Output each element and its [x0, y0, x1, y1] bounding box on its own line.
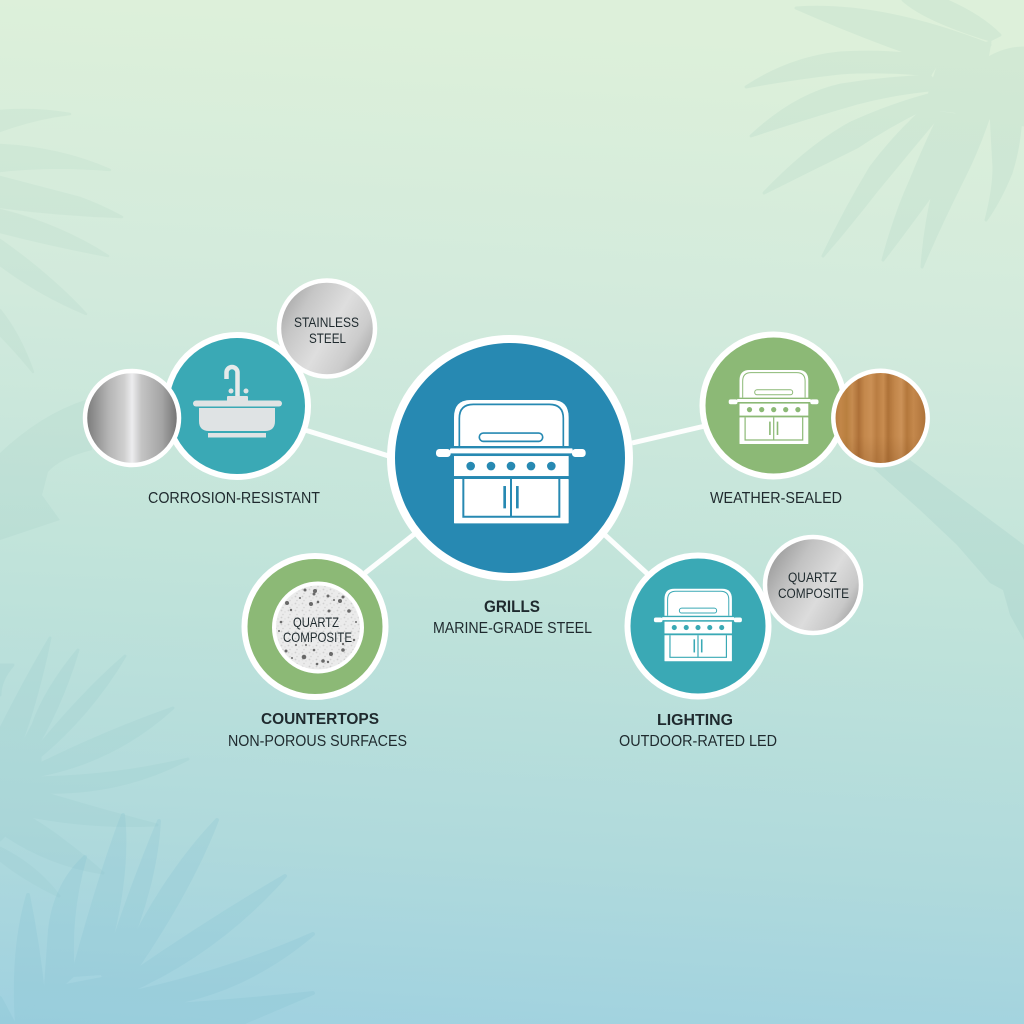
swatch label: COMPOSITE — [778, 586, 849, 601]
label: grills: MARINE-GRADE STEEL — [433, 620, 592, 637]
node: countertops — [244, 556, 386, 697]
label: countertops: COUNTERTOPS — [261, 711, 379, 728]
node: lighting — [628, 556, 768, 696]
node: corrosion-resistant sink — [166, 335, 308, 477]
label: lighting: LIGHTING — [657, 712, 733, 729]
swatch label: STAINLESS — [294, 315, 359, 330]
label: corrosion-resistant: CORROSION-RESISTANT — [148, 490, 320, 507]
palm fronds: bottom left upper cluster — [0, 638, 188, 896]
background shape: left blob — [0, 400, 92, 540]
node: weather-sealed grill — [702, 334, 844, 476]
label: lighting: OUTDOOR-RATED LED — [619, 733, 777, 750]
connector lines — [305, 426, 705, 578]
label: countertops: NON-POROUS SURFACES — [228, 733, 407, 750]
quartz texture — [274, 584, 362, 672]
label: grills: GRILLS — [484, 598, 540, 616]
swatch: brushed steel — [85, 371, 179, 465]
swatch: stainless steel — [279, 280, 375, 376]
icon: grill — [654, 589, 742, 661]
quartz specks — [278, 588, 357, 665]
hub: grills — [391, 339, 629, 577]
teal circle — [628, 556, 768, 696]
swatch label: QUARTZ — [788, 570, 837, 585]
palm fronds: lower right band — [873, 460, 1024, 640]
green ring — [244, 556, 386, 697]
quartz label: COMPOSITE — [283, 629, 352, 645]
green circle — [702, 334, 844, 476]
swatch: wood — [833, 371, 928, 465]
quartz label: QUARTZ — [293, 614, 339, 630]
icon: grill — [729, 370, 818, 444]
hub circle — [391, 339, 629, 577]
swatch label: STEEL — [309, 331, 346, 346]
palm fronds: top right — [746, 0, 1024, 267]
icon: sink — [193, 367, 282, 438]
label: lighting — [619, 712, 777, 750]
label: grills — [433, 598, 592, 637]
icon: main grill — [436, 400, 586, 523]
palm fronds: left edge — [0, 110, 122, 372]
label: weather-sealed: WEATHER-SEALED — [710, 490, 842, 507]
label: countertops — [228, 711, 407, 750]
palm fronds: bottom left lower cluster — [0, 815, 313, 1024]
teal circle — [166, 335, 308, 477]
swatch: quartz composite — [765, 537, 861, 633]
